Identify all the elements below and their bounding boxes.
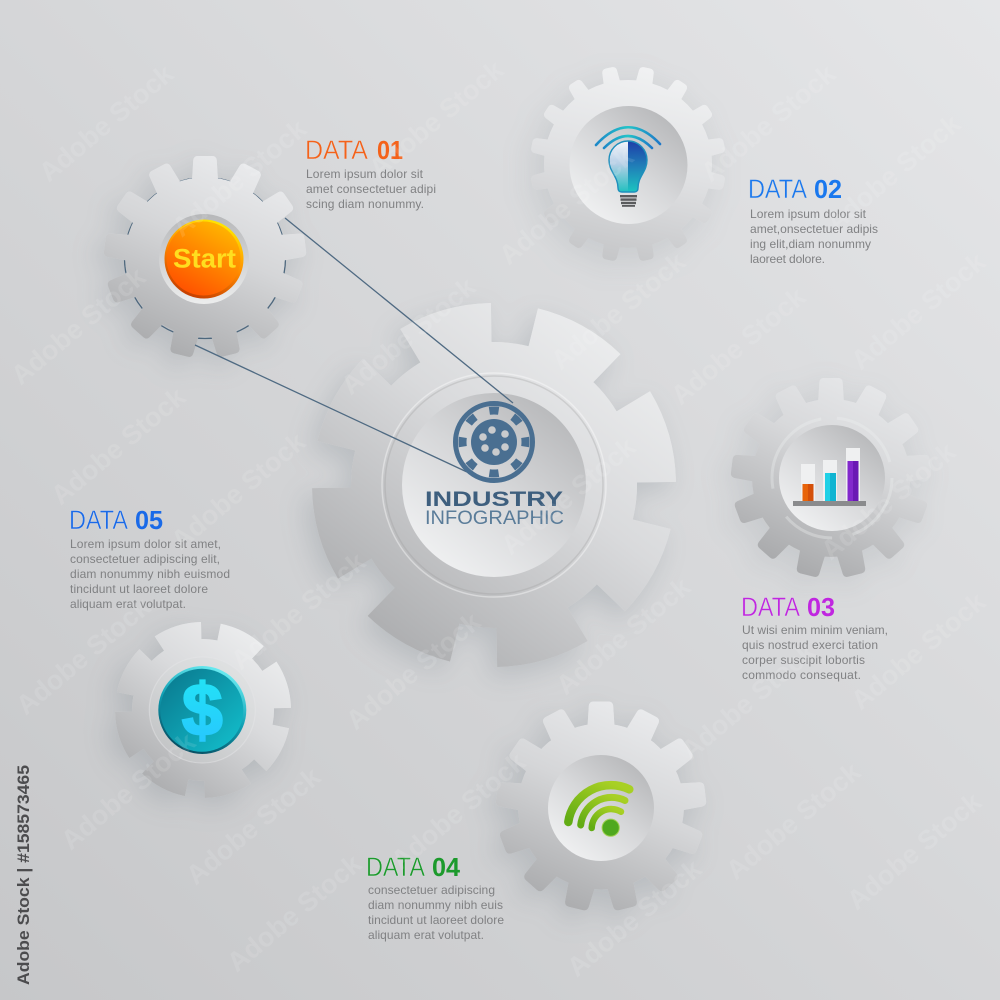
chart hub xyxy=(779,425,885,531)
icon: light bulb xyxy=(596,127,660,207)
icon: industry gear logo xyxy=(456,404,532,480)
start ring xyxy=(159,214,249,304)
gear: bar chart xyxy=(730,378,927,577)
text: data 02: DATA xyxy=(748,174,807,204)
text: data 05: Lorem ipsum dolor sit amet, xyxy=(70,537,221,551)
dollar coin: $ xyxy=(182,670,223,751)
text: data 04: DATA xyxy=(366,852,425,882)
text: data 05: aliquam erat volutpat. xyxy=(70,597,186,611)
bulb hub xyxy=(570,106,688,224)
start button xyxy=(164,220,244,298)
center hub disc xyxy=(402,393,586,577)
title: industry infographic: INDUSTRY xyxy=(425,488,563,511)
dollar gear body xyxy=(110,618,296,802)
gear: light bulb xyxy=(532,67,724,262)
text: data 04: diam nonummy nibh euis xyxy=(368,898,503,912)
big gear body xyxy=(300,290,690,680)
watermark overlay: Adobe Stock xyxy=(493,141,640,271)
text: data 03: corper suscipit lobortis xyxy=(742,653,865,667)
chart gear body xyxy=(730,378,927,577)
text: data 01: amet consectetuer adipi xyxy=(306,182,436,196)
text: data 05: 05 xyxy=(135,505,163,535)
title: industry infographic: INFOGRAPHIC xyxy=(425,508,564,529)
text: data 04: aliquam erat volutpat. xyxy=(368,928,484,942)
connector lines xyxy=(195,218,513,472)
watermark overlay: Adobe Stock xyxy=(221,848,368,978)
watermark overlay: Adobe Stock xyxy=(5,261,152,391)
dollar coin xyxy=(158,666,246,754)
watermark overlay: Adobe Stock xyxy=(225,546,372,676)
text: data 02 xyxy=(748,174,878,266)
watermark overlay: Adobe Stock xyxy=(363,54,510,184)
start button: Start xyxy=(173,244,236,274)
text: data 02: ing elit,diam nonummy xyxy=(750,237,871,251)
text: data 02: amet,onsectetuer adipis xyxy=(750,222,878,236)
watermark overlay: Adobe Stock xyxy=(815,436,962,566)
icon: wifi signal xyxy=(568,785,629,836)
watermark overlay: Adobe Stock xyxy=(845,246,992,376)
watermark overlay: Adobe Stock xyxy=(695,58,842,188)
text: data 01: DATA xyxy=(305,135,368,165)
gear: start xyxy=(100,150,310,362)
gear: central industry gear xyxy=(300,290,690,680)
text: data 02: laoreet dolore. xyxy=(750,252,825,266)
wifi hub xyxy=(548,755,654,861)
text: data 05: tincidunt ut laoreet dolore xyxy=(70,582,208,596)
watermark overlay: Adobe Stock xyxy=(340,606,487,736)
watermark overlay: Adobe Stock xyxy=(335,271,482,401)
watermark overlay: Adobe Stock xyxy=(841,786,988,916)
text: data 03: DATA xyxy=(741,592,800,622)
text: data 03 xyxy=(741,592,888,682)
watermark overlay: Adobe Stock xyxy=(33,58,180,188)
stock id text: Adobe Stock | #158573465 xyxy=(14,765,33,985)
watermark overlay: Adobe Stock xyxy=(720,756,867,886)
text: data 05: consectetuer adipiscing elit, xyxy=(70,552,220,566)
title: industry infographic xyxy=(425,488,564,529)
text: data 05: DATA xyxy=(69,505,128,535)
wifi gear body xyxy=(490,696,712,916)
text: data 01: scing diam nonummy. xyxy=(306,197,424,211)
watermark overlay: Adobe Stock xyxy=(545,246,692,376)
text: data 02: 02 xyxy=(814,174,842,204)
watermark overlay: Adobe Stock xyxy=(845,586,992,716)
text: data 03: commodo consequat. xyxy=(742,668,861,682)
text: data 02: Lorem ipsum dolor sit xyxy=(750,207,867,221)
text: data 04: tincidunt ut laoreet dolore xyxy=(368,913,504,927)
text: data 05 xyxy=(69,505,230,611)
watermark overlay: Adobe Stock xyxy=(10,591,157,721)
watermark overlay: Adobe Stock xyxy=(495,431,642,561)
watermark overlay: Adobe Stock xyxy=(561,853,708,983)
bulb gear body xyxy=(532,67,724,262)
text: data 01 xyxy=(305,135,436,211)
watermark overlay: Adobe Stock xyxy=(385,746,532,876)
watermark overlay: Adobe Stock xyxy=(55,726,202,856)
text: data 01: Lorem ipsum dolor sit xyxy=(306,167,424,181)
text: data 04: 04 xyxy=(432,852,461,882)
text: data 03: quis nostrud exerci tation xyxy=(742,638,878,652)
watermark overlay: Adobe Stock xyxy=(180,761,327,891)
watermark overlay: Adobe Stock xyxy=(165,426,312,556)
watermark overlay: Adobe Stock xyxy=(665,281,812,411)
text: data 03: 03 xyxy=(807,592,835,622)
gear: wifi xyxy=(490,696,712,916)
text: data 05: diam nonummy nibh euismod xyxy=(70,567,230,581)
watermark overlay: Adobe Stock xyxy=(550,571,697,701)
text: data 04: consectetuer adipiscing xyxy=(368,883,495,897)
watermark overlay: Adobe Stock xyxy=(45,381,192,511)
start gear body xyxy=(100,150,310,362)
text: data 04 xyxy=(366,852,504,942)
watermark overlay: Adobe Stock xyxy=(675,636,822,766)
gear: dollar xyxy=(110,618,296,802)
watermark overlay: Adobe Stock xyxy=(820,108,967,238)
watermark overlay: Adobe Stock xyxy=(166,113,313,243)
text: data 03: Ut wisi enim minim veniam, xyxy=(742,623,888,637)
text: data 01: 01 xyxy=(377,135,403,165)
icon: bar chart xyxy=(793,448,866,506)
